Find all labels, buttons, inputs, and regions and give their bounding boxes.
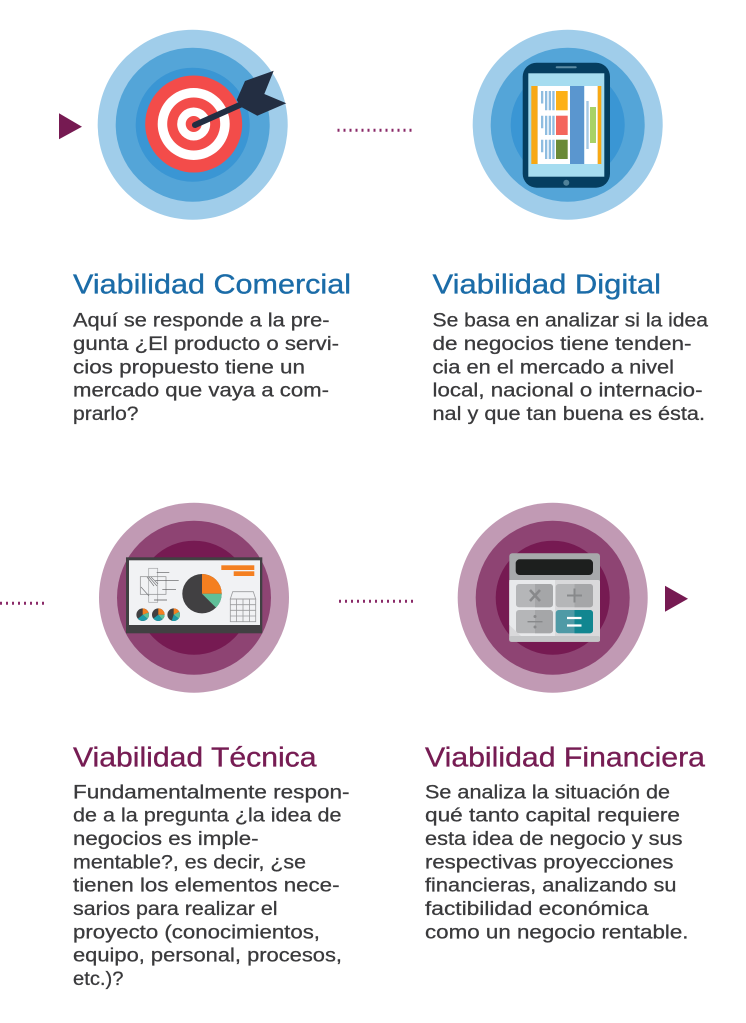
text block: comercial: prarlo? xyxy=(73,403,139,425)
icon: tablet xyxy=(473,30,663,220)
button: divide xyxy=(516,610,553,633)
dotted connector top xyxy=(338,129,412,132)
dotted connector left xyxy=(0,602,45,605)
target rings xyxy=(145,76,242,172)
dotted connector bottom xyxy=(339,600,414,603)
icon: calculator xyxy=(458,503,648,693)
arrow: right triangle xyxy=(665,586,688,612)
text block: tecnica: Fundamentalmente respon- xyxy=(73,781,350,803)
circles: blue rings xyxy=(473,30,663,220)
text block: digital: Se basa en analizar si la idea xyxy=(432,310,708,332)
heading: Viabilidad Digital: Viabilidad Digital xyxy=(432,268,661,300)
calculator display xyxy=(516,559,593,575)
text block: financiera: respectivas proyecciones xyxy=(425,851,674,873)
small pie 1 xyxy=(136,608,149,621)
text block: financiera xyxy=(425,781,688,943)
button: plus xyxy=(556,584,593,607)
text block: tecnica: negocios es imple- xyxy=(73,828,258,850)
button: multiply xyxy=(516,584,553,607)
text block: financiera: financieras, analizando su xyxy=(425,875,676,897)
text block: tecnica: sarios para realizar el xyxy=(73,898,278,920)
text block: financiera: esta idea de negocio y sus xyxy=(425,828,683,850)
small pie 2 xyxy=(152,608,165,621)
heading: Viabilidad Comercial: Viabilidad Comercial xyxy=(73,268,351,300)
text block: financiera: como un negocio rentable. xyxy=(425,921,688,943)
text block: financiera: Se analiza la situación de xyxy=(425,781,670,803)
tablet screen xyxy=(528,73,604,177)
circles: purple rings xyxy=(458,503,648,693)
circles: blue rings xyxy=(98,30,288,220)
text block: comercial: Aquí se responde a la pre- xyxy=(73,310,330,332)
pie chart xyxy=(182,574,222,613)
text block: tecnica: equipo, personal, procesos, xyxy=(73,945,342,967)
text block: financiera: qué tanto capital requiere xyxy=(425,805,680,827)
icon: laptop dashboard xyxy=(99,503,289,693)
circles: purple rings xyxy=(99,503,289,693)
tablet speaker and button xyxy=(556,66,577,186)
laptop screen xyxy=(129,560,260,625)
laptop frame xyxy=(126,557,262,633)
text block: digital: nal y que tan buena es ésta. xyxy=(432,403,705,425)
calculator body xyxy=(509,553,600,642)
dart xyxy=(195,71,286,125)
heading: Viabilidad Financiera: Viabilidad Financiera xyxy=(425,742,705,772)
text block: financiera: factibilidad económica xyxy=(425,898,649,920)
table drawing xyxy=(230,592,256,622)
text block: tecnica xyxy=(73,781,350,990)
text block: tecnica: de a la pregunta ¿la idea de xyxy=(73,805,342,827)
text block: comercial: gunta ¿El producto o servi- xyxy=(73,333,339,355)
text block: tecnica: tienen los elementos nece- xyxy=(73,875,340,897)
small pie charts xyxy=(136,608,180,621)
technical drawing xyxy=(140,568,179,602)
arrow: left triangle xyxy=(59,113,82,139)
icon: target xyxy=(98,30,288,220)
text block: tecnica: etc.)? xyxy=(73,968,124,990)
tablet body xyxy=(523,63,610,188)
text block: comercial: mercado que vaya a com- xyxy=(73,380,329,402)
text block: comercial xyxy=(73,310,339,425)
text block: digital: de negocios tiene tenden- xyxy=(432,333,692,355)
heading: Viabilidad Técnica: Viabilidad Técnica xyxy=(73,742,317,772)
text block: digital: cia en el mercado a nivel xyxy=(432,356,674,378)
button: equals xyxy=(556,610,593,633)
small pie 3 xyxy=(167,608,180,621)
text block: digital: local, nacional o internacio- xyxy=(432,380,702,402)
text block: comercial: cios propuesto tiene un xyxy=(73,356,305,378)
text block: tecnica: mentable?, es decir, ¿se xyxy=(73,851,306,873)
text block: tecnica: proyecto (conocimientos, xyxy=(73,921,320,943)
text block: digital xyxy=(432,310,708,425)
orange bars xyxy=(221,565,254,576)
